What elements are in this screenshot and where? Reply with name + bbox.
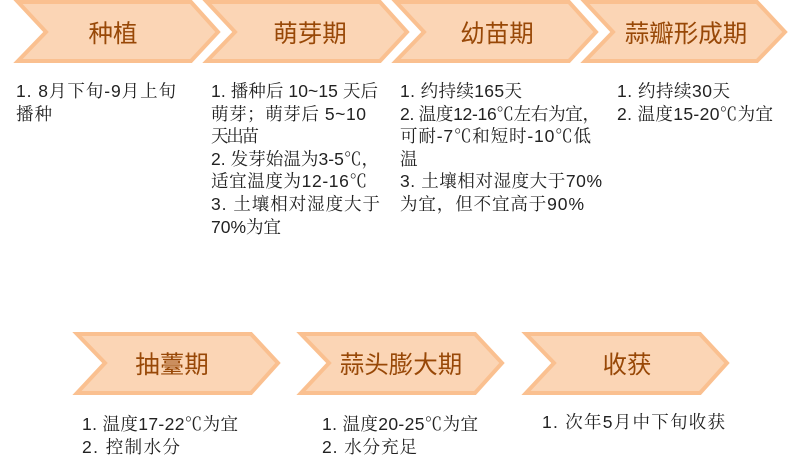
stage: 收获 <box>526 334 727 432</box>
stage: 萌芽期: 3. 土壤相对湿度大于 <box>211 194 380 214</box>
stage: 幼苗期: 3. 土壤相对湿度大于70% <box>400 171 602 191</box>
stage: 种植: 1. 8月下旬-9月上旬 <box>16 81 176 101</box>
stage: 抽薹期: 1. 温度17-22℃为宜 <box>82 414 238 434</box>
stage: 蒜瓣形成期: 蒜瓣形成期 <box>625 15 747 50</box>
stage: 萌芽期 <box>207 2 407 237</box>
stage: 幼苗期 <box>396 2 602 214</box>
stage: 蒜头膨大期: 2. 水分充足 <box>322 437 417 457</box>
stage: 萌芽期: 萌芽期 <box>273 15 347 50</box>
stage: 萌芽期: 天出苗 <box>211 126 259 146</box>
stage: 幼苗期: 幼苗期 <box>460 15 534 50</box>
stage: 萌芽期: 1. 播种后 10~15 天后 <box>211 81 378 101</box>
stage: 蒜头膨大期: 蒜头膨大期 <box>340 346 462 381</box>
stage: 抽薹期: 抽薹期 <box>135 346 209 381</box>
stage: 蒜头膨大期: 1. 温度20-25℃为宜 <box>322 414 478 434</box>
stage: 种植: 播种 <box>16 104 52 124</box>
stage: 种植 <box>16 2 218 124</box>
stage: 幼苗期: 为宜，但不宜高于90% <box>400 194 584 214</box>
stage: 种植: 种植 <box>88 15 138 50</box>
stage: 蒜瓣形成期: 1. 约持续30天 <box>617 81 730 101</box>
stage: 蒜瓣形成期: 2. 温度15-20℃为宜 <box>617 104 773 124</box>
stage: 抽薹期 <box>77 334 278 457</box>
stage: 收获: 收获 <box>602 346 652 381</box>
stage: 萌芽期: 2. 发芽始温为3-5℃， <box>211 149 379 169</box>
stage: 幼苗期: 可耐-7℃和短时-10℃低 <box>400 126 591 146</box>
stage: 萌芽期: 萌芽；萌芽后 5~10 <box>211 104 366 124</box>
stage: 蒜头膨大期 <box>301 334 502 457</box>
stage: 幼苗期: 1. 约持续165天 <box>400 81 522 101</box>
stage: 萌芽期: 适宜温度为12-16℃ <box>211 171 367 191</box>
stage: 抽薹期: 2. 控制水分 <box>82 437 180 457</box>
stage: 萌芽期: 70%为宜 <box>211 217 281 237</box>
stage: 幼苗期: 2. 温度12-16℃左右为宜， <box>400 104 600 124</box>
stage: 幼苗期: 温 <box>400 149 418 169</box>
stage: 蒜瓣形成期 <box>585 2 785 124</box>
stage: 收获: 1. 次年5月中下旬收获 <box>542 412 726 432</box>
